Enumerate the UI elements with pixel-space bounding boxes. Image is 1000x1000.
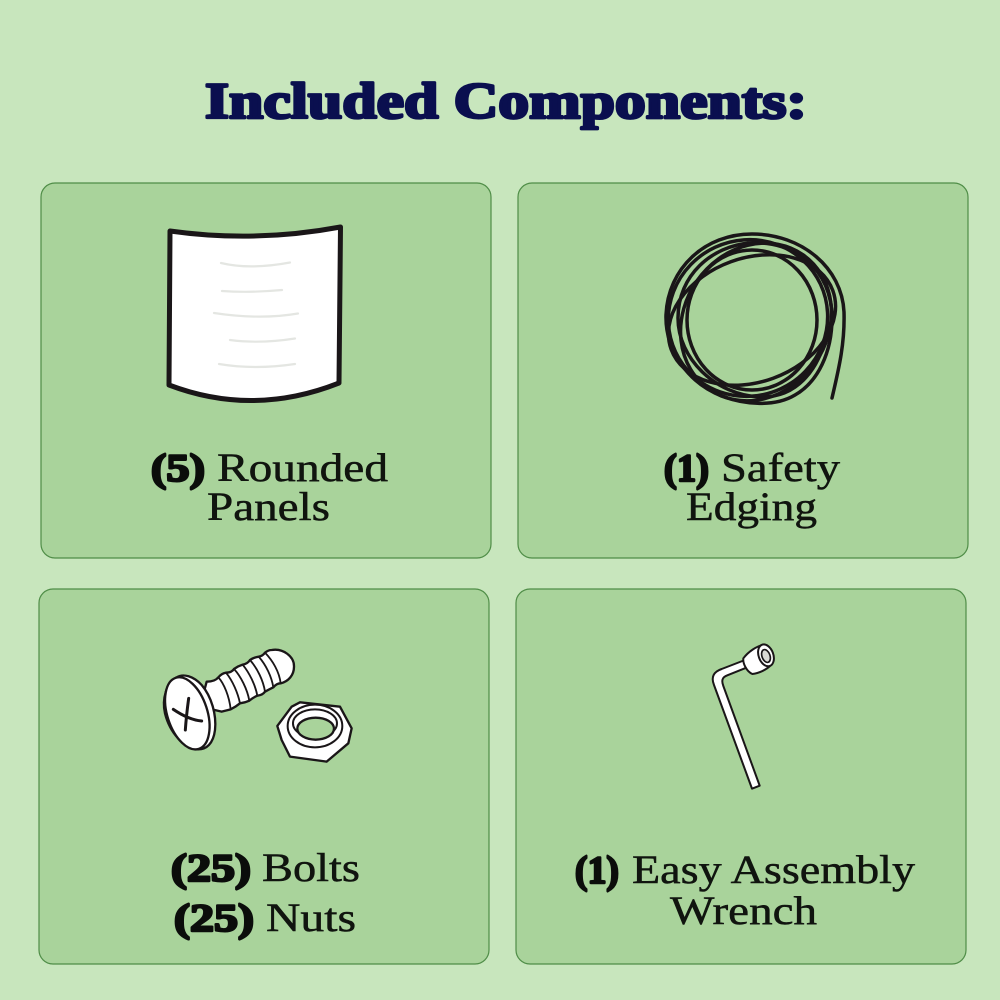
- panel: rounded panels: [41, 183, 491, 558]
- label: (25) Bolts (25) Nuts: (25): [171, 847, 251, 890]
- label: (25) Bolts (25) Nuts: Bolts: [262, 845, 360, 890]
- icon: wrench: [713, 642, 777, 789]
- label: (5) Rounded Panels: Rounded: [217, 445, 388, 490]
- label: (5) Rounded Panels: [151, 445, 388, 529]
- label: (1) Easy Assembly Wrench: Wrench: [670, 888, 817, 933]
- label: (1) Safety Edging: (1): [664, 447, 709, 490]
- panel: safety edging: [518, 183, 968, 558]
- label: (5) Rounded Panels: (5): [151, 447, 205, 490]
- label: (1) Safety Edging: Safety: [721, 445, 840, 490]
- icon: coiled edging: [643, 213, 862, 430]
- icon: bolt: [157, 650, 294, 755]
- icon: nut: [277, 702, 352, 762]
- title: Included Components:: [205, 74, 807, 130]
- icon: curved white panel: [169, 227, 340, 401]
- label: (1) Safety Edging: Edging: [686, 484, 817, 529]
- label: (25) Bolts (25) Nuts: (25): [174, 897, 254, 940]
- label: (1) Easy Assembly Wrench: Easy Assembly: [632, 847, 915, 892]
- label: (25) Bolts (25) Nuts: Nuts: [266, 895, 356, 940]
- label: (25) Bolts (25) Nuts: [171, 845, 360, 940]
- panel: easy assembly wrench: [516, 589, 966, 964]
- label: (1) Safety Edging: [664, 445, 840, 529]
- label: (1) Easy Assembly Wrench: [575, 847, 915, 933]
- label: (1) Easy Assembly Wrench: (1): [575, 849, 619, 892]
- label: (5) Rounded Panels: Panels: [207, 484, 330, 529]
- panel: bolts and nuts: [39, 589, 489, 964]
